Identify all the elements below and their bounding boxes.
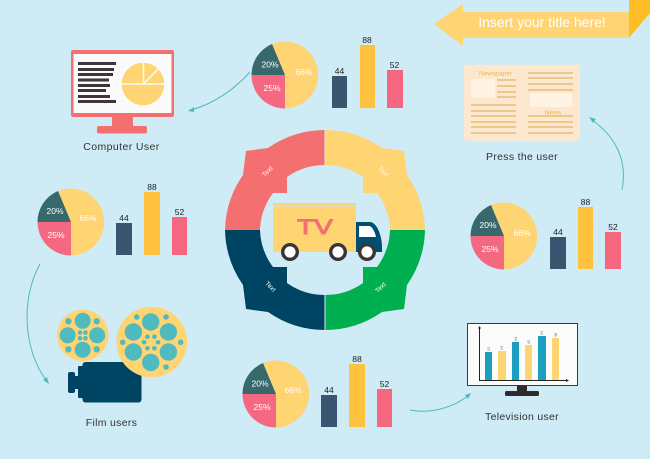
panel: top chart group bbox=[251, 35, 403, 108]
bar chart: 44 bbox=[324, 385, 334, 395]
bar chart: 88 bbox=[362, 35, 372, 45]
tiny bar labels: 33 bbox=[499, 345, 504, 350]
pie chart bbox=[470, 203, 537, 270]
panel: computer user bbox=[71, 50, 174, 153]
banner fold bbox=[629, 0, 650, 38]
pie chart: 20% bbox=[261, 60, 279, 70]
bar chart bbox=[332, 35, 403, 108]
arrow: bars to television user bbox=[410, 393, 471, 411]
bar chart: 88 bbox=[352, 354, 362, 364]
ring segment: yellow: Text bbox=[376, 165, 390, 179]
arrow: pie to computer user bbox=[188, 72, 250, 112]
pie chart: 66% bbox=[79, 213, 97, 223]
pie chart bbox=[37, 189, 104, 256]
icon: newspaper: News bbox=[545, 110, 562, 116]
panel: press user bbox=[464, 65, 580, 163]
pie chart: 20% bbox=[46, 206, 64, 216]
label: film users: Film users bbox=[86, 417, 137, 429]
ring segment: green: Text bbox=[374, 281, 388, 295]
tiny bar labels: 50 bbox=[539, 330, 544, 335]
tiny bar labels bbox=[486, 330, 558, 351]
icon: TV truck bbox=[273, 203, 382, 259]
arrow: pie to film users bbox=[27, 264, 49, 384]
bar chart: 52 bbox=[608, 222, 618, 232]
large reel bbox=[116, 307, 187, 377]
title banner bbox=[434, 0, 650, 46]
panel: right chart group bbox=[470, 197, 621, 270]
panel: left chart group bbox=[37, 182, 187, 256]
ring segment: red: Text bbox=[261, 165, 275, 179]
ring segment: navy bbox=[225, 230, 324, 330]
pie chart: 25% bbox=[481, 244, 499, 254]
ring segment: navy: Text bbox=[263, 280, 277, 294]
bar chart: 44 bbox=[553, 227, 563, 237]
pie chart bbox=[242, 361, 309, 428]
pie chart bbox=[251, 42, 318, 108]
pie chart: 66% bbox=[513, 228, 531, 238]
panel: television user bbox=[468, 324, 578, 423]
bars bbox=[485, 336, 559, 380]
arrow: bars to press user bbox=[589, 117, 623, 190]
tiny bar labels: 40 bbox=[526, 339, 531, 344]
icon: newspaper: Newspaper bbox=[479, 70, 513, 78]
bar chart: 88 bbox=[581, 197, 590, 207]
axes bbox=[480, 327, 568, 380]
icon: film camera bbox=[57, 307, 187, 402]
icon: monitor bbox=[71, 50, 174, 134]
ring segment: green bbox=[326, 230, 425, 330]
label: television user: Television user bbox=[485, 411, 559, 423]
tiny bar labels: 44 bbox=[513, 336, 518, 341]
bar chart: 52 bbox=[175, 207, 184, 217]
pie chart: 20% bbox=[251, 378, 269, 388]
bar chart: 44 bbox=[119, 213, 129, 223]
bar chart: 88 bbox=[147, 182, 157, 192]
bar chart: 52 bbox=[380, 379, 389, 389]
tiny bar labels: 48 bbox=[553, 332, 558, 337]
label: press the user: Press the user bbox=[486, 151, 558, 163]
small reel bbox=[57, 310, 108, 361]
label: computer user: Computer User bbox=[83, 141, 160, 153]
ring segment: red bbox=[225, 130, 324, 230]
pie chart: 66% bbox=[284, 385, 302, 395]
pie chart: 66% bbox=[295, 67, 313, 77]
pie chart: 20% bbox=[479, 220, 497, 230]
pie chart: 25% bbox=[253, 402, 271, 412]
bar chart bbox=[321, 354, 392, 427]
icon: television bbox=[468, 324, 578, 396]
icon: TV truck: TV bbox=[297, 215, 333, 239]
ring segment: yellow bbox=[326, 130, 425, 230]
panel: film users bbox=[57, 307, 187, 429]
bar chart bbox=[550, 197, 621, 269]
central ring diagram bbox=[225, 130, 425, 330]
title text: Insert your title here! bbox=[478, 14, 606, 30]
icon: newspaper bbox=[464, 65, 580, 141]
banner arrow bbox=[434, 4, 629, 46]
pie chart: 25% bbox=[263, 83, 281, 93]
bar chart bbox=[116, 182, 187, 255]
tiny bar labels: 32 bbox=[486, 346, 491, 351]
panel: bottom chart group bbox=[242, 354, 392, 428]
bar chart: 52 bbox=[390, 60, 399, 70]
pie chart: 25% bbox=[47, 230, 65, 240]
bar chart: 44 bbox=[335, 66, 344, 76]
